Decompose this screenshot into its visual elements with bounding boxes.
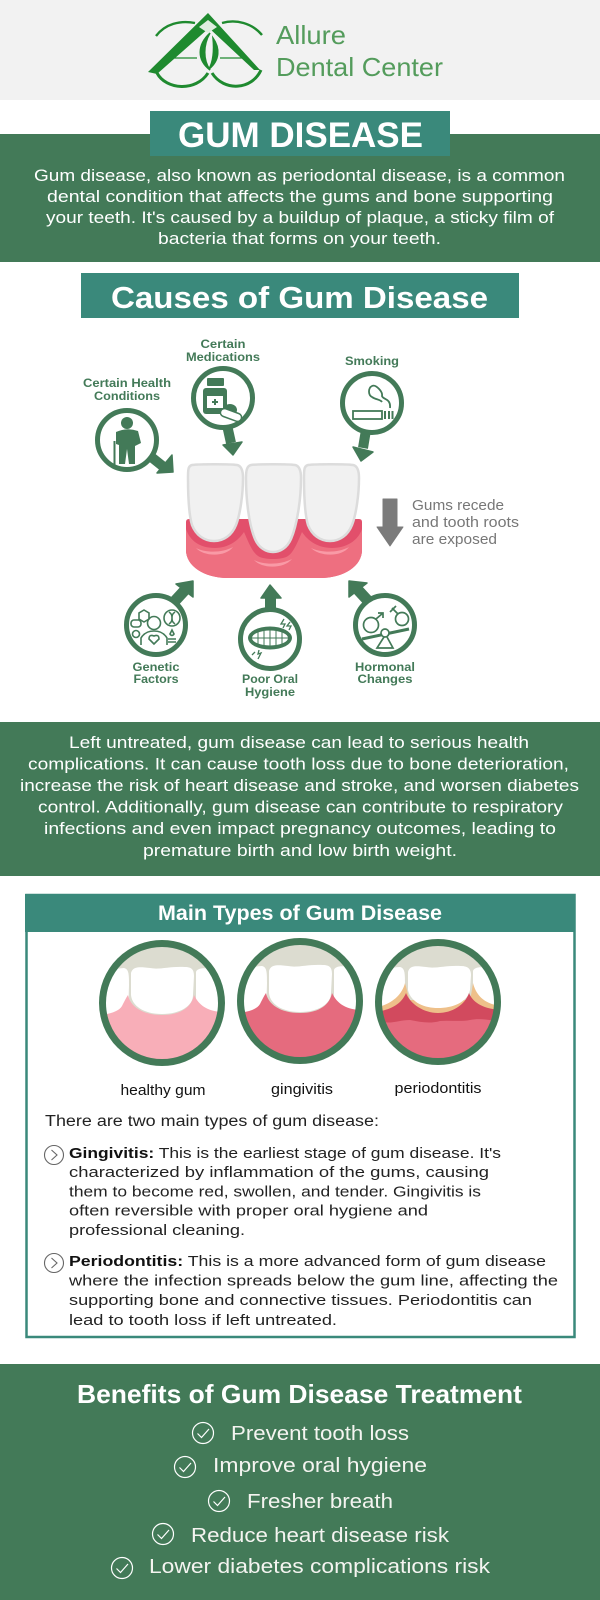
text: intro to types: There are two main types of gum disease: <box>45 1113 379 1130</box>
cause: hormonal changes: Changes <box>358 674 412 686</box>
heading: main types <box>25 894 575 932</box>
text: periodontitis: lead to tooth loss if left untreated. <box>69 1312 337 1329</box>
heading: causes: Causes of Gum Disease <box>111 280 488 315</box>
heading: causes <box>81 273 519 318</box>
panel: intro band <box>0 134 600 262</box>
panel: complications band <box>0 722 600 876</box>
cause: certain medications: Certain <box>200 339 246 351</box>
panel: benefits <box>0 1364 600 1600</box>
panel: complications band: Left untreated, gum disease can lead to serious health <box>69 734 529 752</box>
title: GUM DISEASE <box>178 116 423 155</box>
cause: poor oral hygiene: Hygiene <box>245 687 295 699</box>
logo text <box>276 20 443 82</box>
callout: gums recede: and tooth roots <box>412 515 519 531</box>
panel: complications band: increase the risk of heart disease and stroke, and worsen diabetes <box>20 777 579 795</box>
labels: gum types: periodontitis <box>394 1080 482 1097</box>
benefit: fresher breath <box>208 1490 393 1513</box>
text: gingivitis: characterized by inflammation of the gums, causing <box>69 1164 489 1181</box>
cause: genetic factors: Genetic <box>132 662 180 674</box>
cause: genetic factors: Factors <box>134 674 178 686</box>
illustration: periodontitis <box>375 939 501 1070</box>
cause: certain medications <box>186 339 260 455</box>
cause: certain medications: Medications <box>186 352 260 364</box>
logo text: Allure <box>276 20 346 50</box>
text: gingivitis: professional cleaning. <box>69 1222 245 1239</box>
text: gingivitis: them to become red, swollen, and tender. Gingivitis is <box>69 1184 481 1200</box>
panel: intro band: dental condition that affects the gums and bone supporting <box>47 188 553 206</box>
cause: hormonal changes <box>349 581 415 686</box>
labels: gum types: healthy gum <box>120 1082 206 1099</box>
benefit: fresher breath: Fresher breath <box>247 1491 393 1513</box>
cause: poor oral hygiene: Poor Oral <box>242 674 298 686</box>
logo text: Dental Center <box>276 52 443 82</box>
icon: chevron periodontitis <box>44 1254 64 1272</box>
text: periodontitis: where the infection spreads below the gum line, affecting the <box>68 1272 558 1290</box>
illustration: healthy gum <box>100 940 225 1070</box>
logo mark <box>148 13 262 87</box>
text: periodontitis: Periodontitis: This is a more advanced form of gum disease <box>69 1253 546 1270</box>
cause: smoking <box>342 356 402 461</box>
callout: gums recede: Gums recede <box>412 498 504 514</box>
panel: intro band: your teeth. It's caused by a buildup of plaque, a sticky film of <box>46 209 554 227</box>
benefit: improve oral hygiene: Improve oral hygiene <box>213 1455 427 1477</box>
labels: gum types <box>120 1080 482 1099</box>
panel: main types <box>25 894 575 1337</box>
cause: hormonal changes: Hormonal <box>355 662 415 674</box>
text: gingivitis: Gingivitis: This is the earliest stage of gum disease. It's <box>69 1145 501 1162</box>
heading: main types: Main Types of Gum Disease <box>158 902 442 925</box>
text: periodontitis: supporting bone and connective tissues. Periodontitis can <box>69 1292 532 1309</box>
header band with logo <box>0 0 600 100</box>
arrow: gums recede <box>377 499 403 546</box>
teeth and gum illustration <box>186 464 362 578</box>
panel: complications band: premature birth and low birth weight. <box>143 842 457 860</box>
panel: complications band: control. Additionally, gum disease can contribute to respiratory <box>38 798 564 816</box>
cause: certain health conditions <box>83 378 173 473</box>
benefit: prevent tooth loss: Prevent tooth loss <box>231 1423 409 1445</box>
text: periodontitis <box>68 1253 558 1329</box>
illustration: gingivitis <box>238 938 363 1068</box>
panel: complications band: infections and even impact pregnancy outcomes, leading to <box>44 820 556 838</box>
heading: benefits: Benefits of Gum Disease Treatment <box>77 1379 522 1409</box>
benefit: reduce heart disease risk: Reduce heart disease risk <box>191 1525 450 1547</box>
cause: certain health conditions: Conditions <box>94 391 160 403</box>
benefit: lower diabetes complications risk: Lower diabetes complications risk <box>149 1556 491 1578</box>
panel: intro band: Gum disease, also known as periodontal disease, is a common <box>34 167 565 185</box>
text: gingivitis <box>69 1145 501 1239</box>
callout: gums recede <box>412 498 519 548</box>
panel: complications band: complications. It can cause tooth loss due to bone deterioration, <box>28 756 569 774</box>
cause: certain health conditions: Certain Health <box>83 378 171 390</box>
icon: chevron gingivitis <box>44 1146 64 1164</box>
cause: genetic factors <box>126 581 193 686</box>
cause: poor oral hygiene <box>240 585 300 699</box>
callout: gums recede: are exposed <box>412 532 497 548</box>
cause: smoking: Smoking <box>345 356 399 368</box>
text: gingivitis: often reversible with proper oral hygiene and <box>69 1202 428 1220</box>
panel: intro band: bacteria that forms on your teeth. <box>158 230 441 248</box>
labels: gum types: gingivitis <box>271 1081 333 1098</box>
